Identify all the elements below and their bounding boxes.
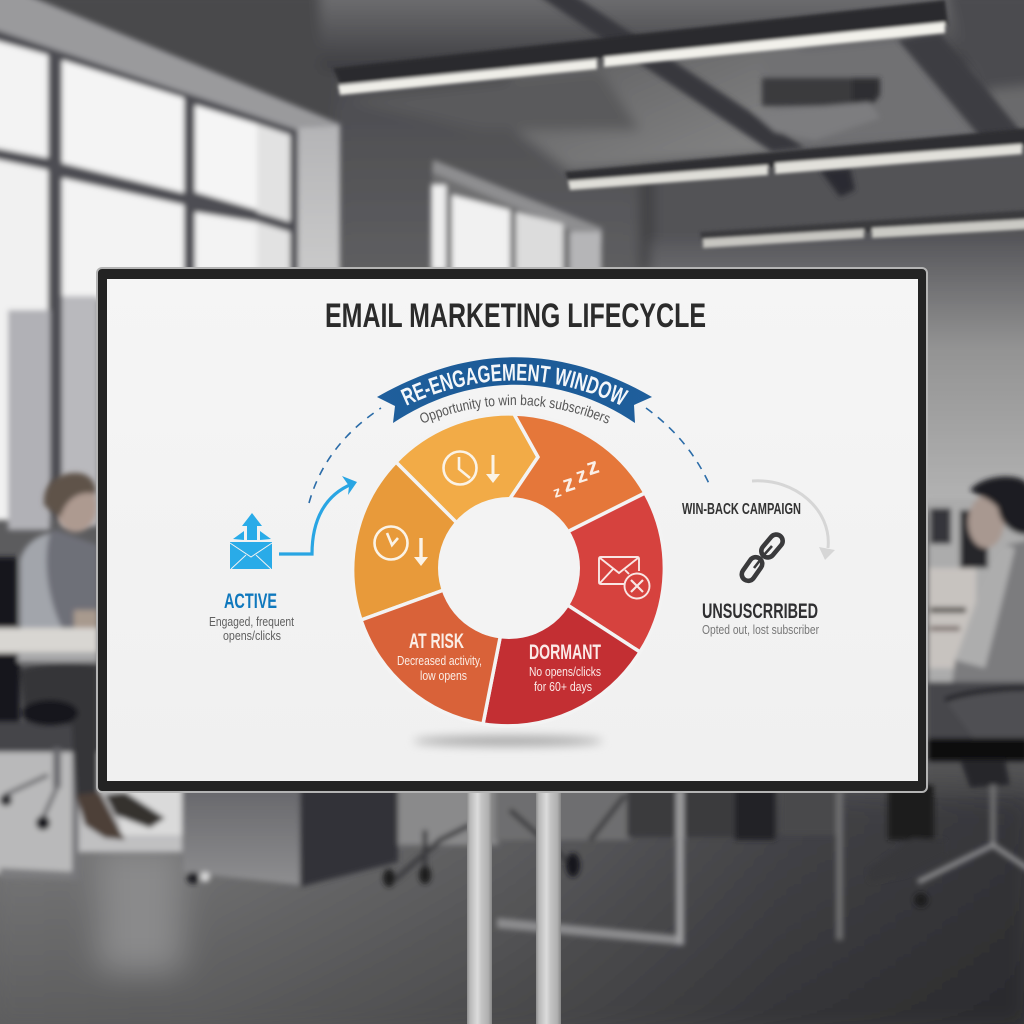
banner: re-engagement window: RE-ENGAGEMENT WINDOW bbox=[400, 364, 629, 406]
label: win-back campaign: WIN-BACK CAMPAIGN bbox=[682, 501, 801, 518]
left person: head bbox=[55, 480, 97, 532]
soffit band above left window bbox=[0, 0, 340, 135]
icon: sleeping zzz: z bbox=[573, 463, 590, 488]
donut hole bbox=[438, 497, 580, 639]
ceiling vent bbox=[762, 78, 870, 106]
right person: torso bbox=[950, 540, 1024, 700]
left window frame bbox=[0, 28, 298, 520]
segment: amber early decline bbox=[353, 462, 509, 620]
label: dormant: No opens/clicks bbox=[529, 665, 601, 679]
lifecycle donut chart bbox=[353, 414, 664, 726]
right person: leg and shoe bbox=[888, 785, 934, 840]
segment: red mail cancelled bbox=[509, 493, 664, 652]
left person: desk bbox=[0, 628, 98, 653]
icon: clock and down arrow (top) bbox=[444, 452, 500, 484]
icon: mail with cross bbox=[599, 557, 650, 598]
right person: desk bbox=[928, 568, 976, 668]
dark upper wall bbox=[0, 0, 350, 290]
label: unsubscribed: Opted out, lost subscriber bbox=[702, 623, 819, 637]
dashed arc: left bbox=[309, 408, 381, 503]
label: dormant bbox=[529, 641, 601, 694]
left floor area bbox=[0, 752, 78, 874]
window reveal bbox=[298, 126, 340, 290]
label: at risk: Decreased activity, bbox=[397, 654, 482, 668]
label: active: ACTIVE bbox=[224, 590, 277, 613]
right person: head bbox=[968, 496, 1004, 548]
right wall bbox=[650, 240, 1024, 510]
banner: re-engagement window: Opportunity to win back subscribers bbox=[420, 394, 610, 424]
right person: chair bbox=[928, 682, 1024, 740]
dashed arc: right bbox=[646, 408, 711, 488]
right person: wall and monitors bbox=[928, 500, 1024, 690]
ceiling light housings bbox=[333, 0, 948, 84]
donut shadow bbox=[413, 736, 603, 746]
background furniture bbox=[398, 785, 498, 845]
segment: dormant bbox=[483, 568, 640, 726]
centre window bbox=[432, 160, 602, 290]
label: dormant: DORMANT bbox=[529, 641, 601, 664]
floor bbox=[0, 785, 1024, 1024]
left person: torso bbox=[20, 530, 98, 630]
upper ceiling bbox=[320, 0, 1024, 70]
segment: amber decline bbox=[396, 414, 538, 568]
label: at risk: low opens bbox=[420, 669, 467, 683]
arrow: win-back curve bbox=[752, 481, 835, 560]
icon: sleeping zzz: z bbox=[583, 452, 602, 480]
icon: sleeping zzz: z bbox=[551, 483, 563, 502]
glass partition frame bbox=[497, 918, 682, 945]
segment: at risk bbox=[361, 568, 509, 724]
label: at risk bbox=[397, 630, 482, 683]
label: active: opens/clicks bbox=[223, 628, 281, 643]
display board bbox=[96, 267, 928, 793]
ceiling lights bbox=[338, 59, 597, 95]
segment: orange sleeping bbox=[509, 414, 645, 568]
cabinet bbox=[183, 785, 300, 885]
icon: clock and down arrow (left) bbox=[374, 526, 428, 566]
left person: chair and legs bbox=[0, 662, 20, 722]
board screen bbox=[107, 279, 918, 781]
left person: shoes bbox=[76, 792, 125, 840]
arrow: active to lifecycle bbox=[279, 476, 357, 554]
icon: active envelope bbox=[230, 513, 272, 569]
label: active: Engaged, frequent bbox=[209, 614, 294, 629]
label: dormant: for 60+ days bbox=[534, 680, 592, 694]
icon: sleeping zzz: z bbox=[559, 469, 578, 497]
label: at risk: AT RISK bbox=[409, 630, 464, 653]
left person: chair back bbox=[0, 557, 17, 707]
title: EMAIL MARKETING LIFECYCLE bbox=[325, 297, 706, 335]
label: active bbox=[209, 590, 294, 643]
icon: broken chain link bbox=[739, 532, 785, 583]
label: unsubscribed: UNSUSCRRIBED bbox=[702, 600, 818, 623]
label: unsubscribed bbox=[702, 600, 819, 637]
icon: sleeping zzz bbox=[551, 452, 602, 502]
left window panes bbox=[0, 39, 48, 158]
ceiling panels bbox=[500, 40, 800, 170]
ceiling beams bbox=[530, 0, 805, 152]
